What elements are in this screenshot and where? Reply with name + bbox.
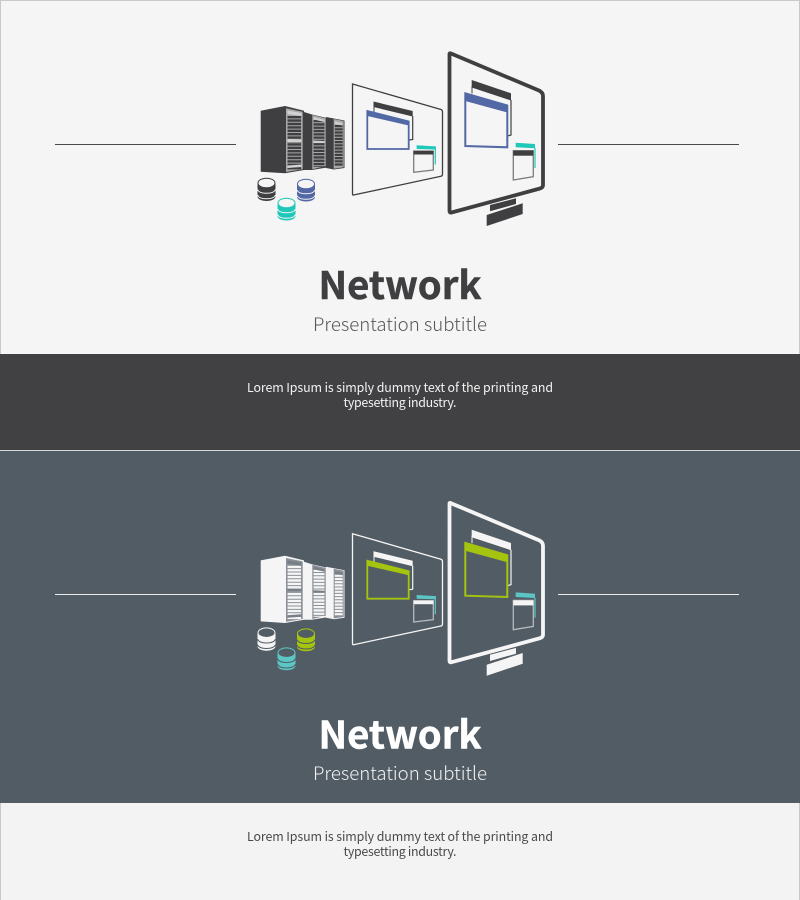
title: Network: Network — [318, 255, 482, 310]
right rule — [558, 594, 739, 596]
icon: monitor with windows — [450, 503, 543, 676]
subtitle light: Presentation subtitle — [313, 760, 487, 786]
icon: network illustration light — [258, 503, 543, 676]
left rule — [55, 144, 236, 146]
icon: monitor stand — [487, 648, 523, 676]
icon: tablet panel with windows — [352, 534, 442, 645]
panel: dark text band — [0, 354, 800, 450]
subtitle: Presentation subtitle — [313, 311, 487, 337]
icon: monitor stand — [487, 198, 523, 226]
text block: light band copy: typesetting industry. — [344, 842, 456, 860]
text block: dark band copy — [247, 378, 553, 411]
icon: green database — [297, 629, 315, 651]
icon: tablet panel with windows — [352, 84, 442, 195]
panel: slate section — [0, 450, 800, 803]
icon: server racks — [261, 556, 344, 623]
icon: white database — [258, 628, 276, 651]
icon: monitor with windows — [450, 53, 543, 226]
left rule — [55, 594, 236, 596]
text block: dark band copy: typesetting industry. — [344, 393, 456, 411]
text block: light band copy — [247, 827, 553, 860]
icon: teal database — [278, 648, 296, 670]
icon: blue database — [297, 179, 315, 202]
icon: black database — [258, 178, 276, 201]
right rule — [558, 144, 739, 146]
icon: server racks — [261, 106, 344, 173]
icon: network illustration dark — [258, 53, 543, 226]
panel: light bottom band — [1, 803, 799, 900]
icon: teal database — [278, 198, 296, 220]
text block: dark band copy: Lorem Ipsum is simply dummy text of the printing and — [247, 378, 553, 396]
text block: light band copy: Lorem Ipsum is simply dummy text of the printing and — [247, 827, 553, 845]
title: Network light: Network — [318, 704, 482, 760]
